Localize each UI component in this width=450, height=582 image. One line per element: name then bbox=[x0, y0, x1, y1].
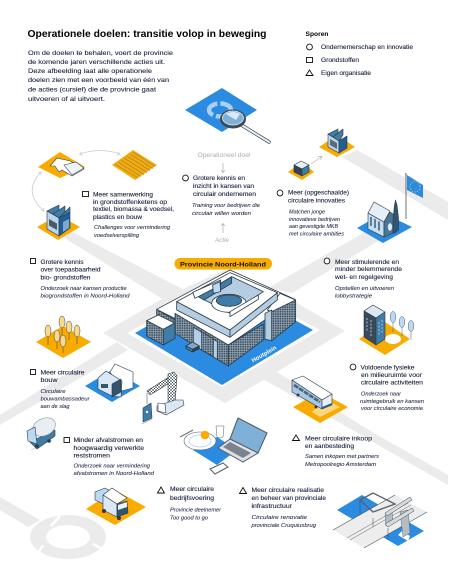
pill: provincie noord-holland bbox=[174, 258, 272, 270]
goal: opgeschaalde innovaties: circulaire innovaties bbox=[288, 198, 345, 204]
icon: crane with door bbox=[142, 372, 184, 424]
legend: sporen: Ondernemerschap en innovatie bbox=[321, 45, 414, 51]
goal: fysieke en milieuruimte bbox=[350, 364, 424, 412]
legend: sporen: Grondstoffen bbox=[321, 58, 359, 64]
icon: bridge over water bbox=[333, 493, 427, 548]
icon: waste truck on orange tile bbox=[86, 488, 146, 525]
goal: meer samenwerking: textiel, biomassa & voedsel, bbox=[93, 207, 174, 213]
operationeel doel key with sample: Training voor bedrijven die bbox=[192, 203, 260, 209]
goal: meer samenwerking: voedselverspilling bbox=[94, 233, 140, 239]
goal: circulaire bouw: Meer circulaire bbox=[40, 370, 85, 376]
operationeel doel key with sample: circulair willen worden bbox=[192, 211, 251, 217]
goal: circulaire bedrijfsvoering: Provincie deelnemer bbox=[170, 508, 222, 514]
goal: grotere kennis bio-grondstoffen bbox=[30, 258, 130, 300]
icon: table with plate and laptop bbox=[180, 418, 267, 474]
legend: sporen bbox=[306, 32, 414, 77]
goal: grotere kennis bio-grondstoffen: bio- grondstoffen bbox=[40, 276, 90, 282]
blue plaza bbox=[135, 282, 313, 385]
goal: grotere kennis bio-grondstoffen: Onderzoek naar kansen productie bbox=[40, 286, 126, 292]
goal: circulaire realisatie: en beheer van provinciale bbox=[252, 496, 327, 502]
operationeel doel key with sample: Operationeel doel bbox=[198, 153, 250, 159]
goal: fysieke en milieuruimte: ruimtegebruik en kansen bbox=[360, 399, 424, 405]
icon: magnifier on blue tile bbox=[185, 88, 269, 142]
goal: circulaire inkoop: en aanbesteding bbox=[305, 444, 354, 450]
goal: opgeschaalde innovaties: met circulaire ambities bbox=[289, 232, 344, 238]
goal: fysieke en milieuruimte: en milieuruimte voor bbox=[361, 373, 422, 379]
goal: meer samenwerking: plastics en bouw bbox=[93, 215, 143, 221]
goal: circulaire inkoop: Meer circulaire inkoop bbox=[305, 436, 373, 442]
goal: circulaire realisatie: provinciale Cruquiusbrug bbox=[250, 523, 317, 529]
goal: stimulerende regelgeving bbox=[324, 258, 403, 300]
goal: stimulerende regelgeving: Opstellen en uitvoeren bbox=[335, 286, 394, 292]
goal: opgeschaalde innovaties: aan gevestigde MKB bbox=[289, 224, 338, 230]
goal: meer samenwerking: in grondstoffenketens op bbox=[93, 200, 168, 206]
icon: bus on orange tile bbox=[292, 376, 348, 423]
goal: minder afvalstromen: reststromen bbox=[74, 454, 110, 460]
goal: circulaire bouw bbox=[30, 370, 91, 410]
operationeel doel key with sample: Actie bbox=[214, 238, 230, 244]
icon: trees on orange tile bbox=[36, 316, 91, 358]
intro text: Deze afbeelding laat alle operationele bbox=[28, 68, 153, 75]
goal: minder afvalstromen: Minder afvalstromen en bbox=[74, 438, 143, 444]
icon: church on blue tile bbox=[357, 200, 412, 243]
label: houtplein: Houtplein bbox=[251, 345, 278, 364]
goal: circulaire inkoop: Samen inkopen met partners bbox=[305, 454, 379, 460]
goal: circulaire bouw: aan de slag bbox=[40, 404, 70, 410]
goal: circulaire bouw: bouw bbox=[40, 378, 58, 384]
intro text: de acties (cursief) die de provincie gaat bbox=[28, 86, 156, 94]
goal: opgeschaalde innovaties: Meer (opgeschaalde) bbox=[288, 190, 349, 196]
operationeel doel key with sample bbox=[183, 153, 260, 244]
icon: houses on blue tile bbox=[85, 364, 140, 402]
goal: circulaire realisatie: infrastructuur bbox=[252, 504, 292, 510]
goal: meer samenwerking: Challenges voor vermindering bbox=[94, 225, 171, 231]
goal: stimulerende regelgeving: minder belemmerende bbox=[335, 267, 403, 273]
goal: fysieke en milieuruimte: circulaire activiteiten bbox=[361, 380, 423, 386]
goal: opgeschaalde innovaties: Matchen jonge bbox=[289, 210, 325, 216]
goal: meer samenwerking bbox=[82, 192, 174, 239]
intro text: uitvoeren of al uitvoert. bbox=[28, 96, 105, 103]
goal: opgeschaalde innovaties bbox=[277, 190, 349, 238]
goal: circulaire realisatie: Circulaire renovatie bbox=[252, 515, 307, 521]
intro text: de komende jaren verschillende acties uit. bbox=[28, 59, 165, 66]
goal: circulaire bedrijfsvoering: Too good to go bbox=[170, 516, 208, 522]
goal: minder afvalstromen: Onderzoek naar vermindering bbox=[74, 464, 151, 470]
goal: grotere kennis bio-grondstoffen: over toepasbaarheid bbox=[40, 268, 100, 274]
goal: stimulerende regelgeving: wet- en regelgeving bbox=[334, 275, 393, 281]
icon: larger factory on orange tile bbox=[319, 129, 355, 157]
goal: stimulerende regelgeving: Meer stimulerende en bbox=[335, 260, 399, 266]
goal: circulaire bouw: bouwambassadeur bbox=[40, 396, 91, 402]
arrows between raw material icons bbox=[32, 150, 120, 211]
goal: circulaire inkoop: Metropoolregio Amsterdam bbox=[305, 462, 376, 468]
operationeel doel key with sample: Grotere kennis en bbox=[193, 176, 245, 182]
goal: circulaire realisatie: Meer circulaire realisatie bbox=[252, 488, 325, 494]
goal: minder afvalstromen: afvalstromen in Noord-Holland bbox=[74, 471, 155, 477]
icon: striped textile tile bbox=[112, 150, 157, 180]
title: Operationele doelen: transitie volop in beweging bbox=[28, 29, 266, 40]
goal: meer samenwerking: Meer samenwerking bbox=[93, 192, 153, 198]
goal: minder afvalstromen bbox=[64, 438, 155, 477]
pill: provincie noord-holland: Provincie Noord-Holland bbox=[180, 261, 266, 268]
goal: circulaire bedrijfsvoering: Meer circulaire bbox=[170, 487, 215, 493]
goal: grotere kennis bio-grondstoffen: Grotere kennis bbox=[40, 260, 84, 266]
goal: grotere kennis bio-grondstoffen: biogrondstoffen in Noord-Holland bbox=[40, 294, 130, 300]
goal: circulaire bouw: Circulaire bbox=[40, 389, 66, 395]
legend: sporen: Eigen organisatie bbox=[321, 71, 372, 77]
icon: factory on orange tile bbox=[37, 205, 80, 240]
goal: fysieke en milieuruimte: voor circulaire economie bbox=[361, 406, 423, 412]
goal: circulaire bedrijfsvoering bbox=[158, 487, 222, 522]
intro text: doelen zien met een voorbeeld van één van bbox=[28, 77, 170, 84]
arrow: growth to larger factory bbox=[311, 156, 322, 164]
icon: small box on orange tile bbox=[288, 161, 314, 180]
road network bbox=[0, 150, 448, 559]
legend: sporen: Sporen bbox=[306, 32, 329, 38]
icon: tower with trees on orange tile bbox=[359, 305, 414, 355]
icon: cement mixer truck bbox=[27, 414, 58, 450]
icon: clothing on orange tile bbox=[38, 152, 85, 178]
goal: fysieke en milieuruimte: Onderzoek naar bbox=[361, 392, 402, 398]
goal: circulaire bedrijfsvoering: bedrijfsvoering bbox=[170, 496, 214, 502]
goal: stimulerende regelgeving: lobbystrategie bbox=[335, 294, 372, 300]
goal: fysieke en milieuruimte: Voldoende fysieke bbox=[360, 366, 415, 372]
intro text: Om de doelen te behalen, voert de provincie bbox=[28, 50, 174, 57]
goal: circulaire realisatie bbox=[240, 488, 327, 529]
icon: EU flag bbox=[405, 173, 423, 219]
operationeel doel key with sample: circulair ondernemen bbox=[193, 192, 256, 198]
goal: minder afvalstromen: hoogwaardig verwerkte bbox=[74, 446, 145, 452]
intro text bbox=[28, 50, 174, 103]
main building: provinciehuis bbox=[147, 270, 296, 366]
operationeel doel key with sample: inzicht in kansen van bbox=[193, 184, 254, 190]
goal: opgeschaalde innovaties: innovatieve bedrijven bbox=[289, 217, 340, 223]
goal: circulaire inkoop bbox=[292, 435, 379, 468]
